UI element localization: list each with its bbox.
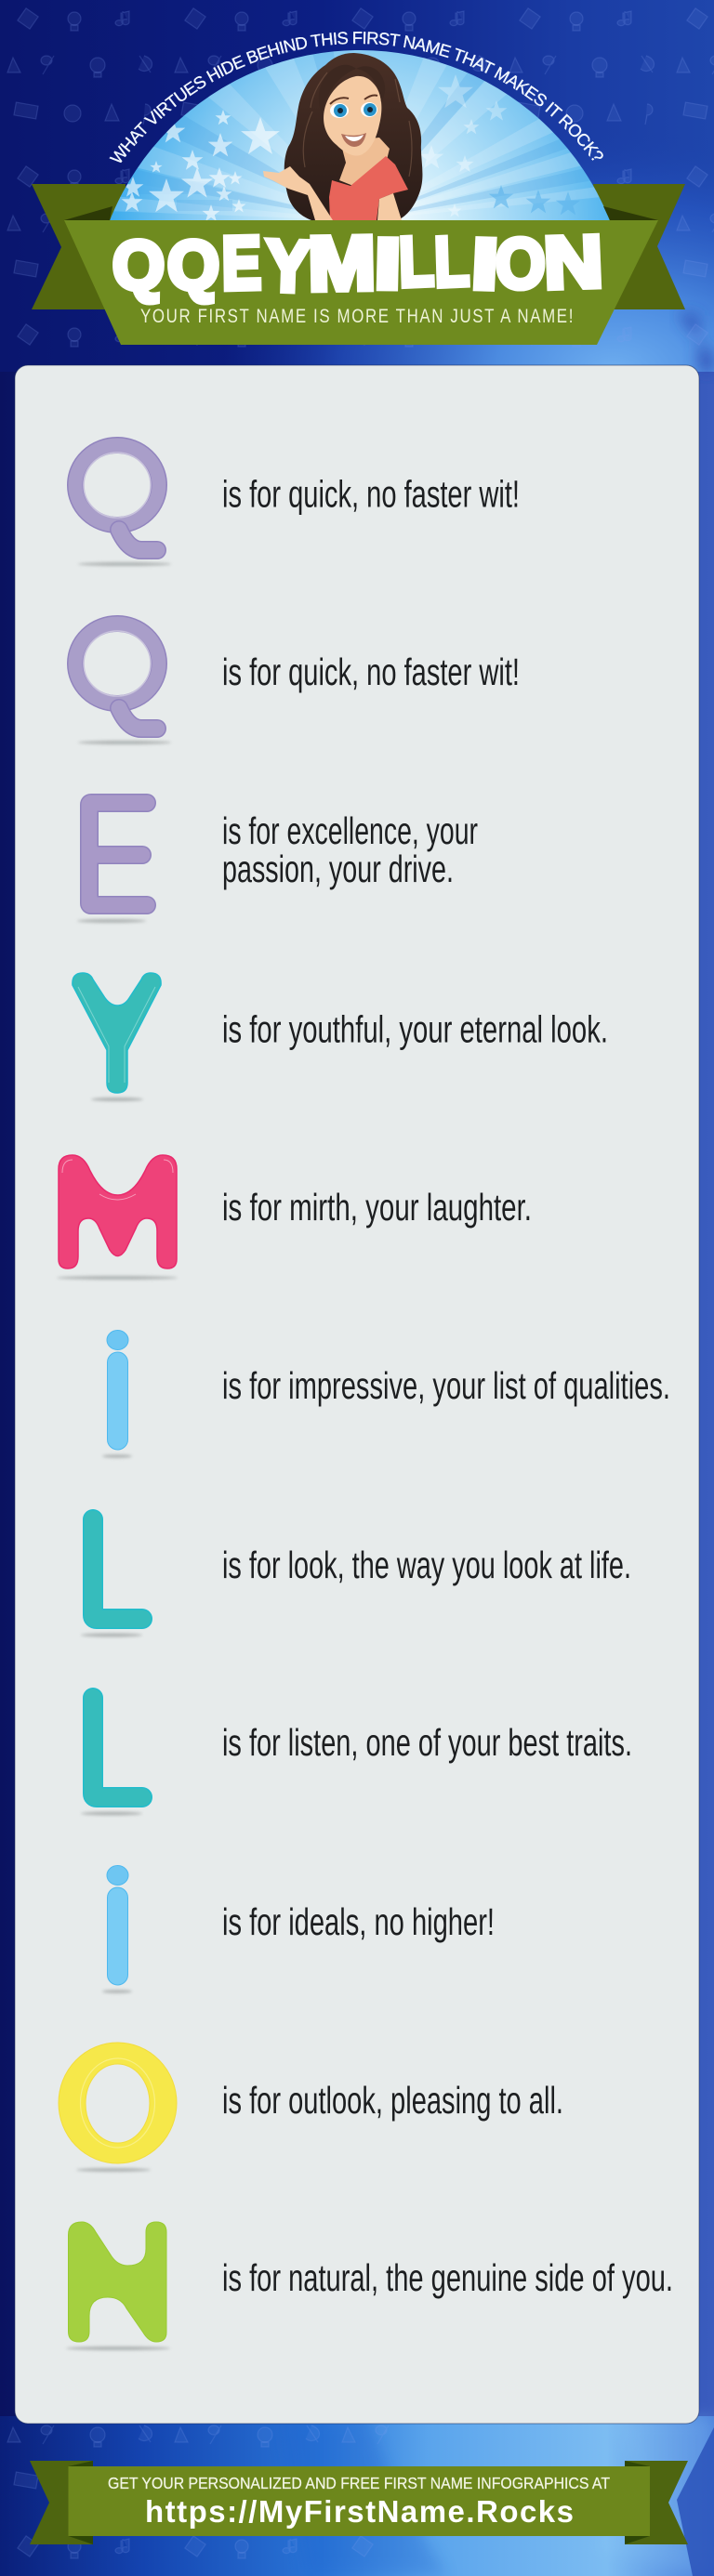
footer url: https://MyFirstName.Rocks (145, 2494, 574, 2529)
row 6: i (102, 1331, 670, 1458)
curved tagline: WHAT VIRTUES HIDE BEHIND THIS FIRST NAME THAT MAKES IT ROCK? (110, 32, 603, 164)
mouth (341, 133, 366, 147)
letter Q (75, 445, 171, 566)
text: is for excellence, your (222, 809, 478, 852)
text: is for ideals, no higher! (222, 1900, 495, 1943)
content panel (15, 365, 699, 2424)
row 4: Y (73, 973, 608, 1101)
letter L (81, 1519, 142, 1637)
row 10: O (59, 2043, 563, 2172)
name title: I (469, 224, 500, 305)
letter i (102, 1866, 132, 1993)
subtitle: YOUR FIRST NAME IS MORE THAN JUST A NAME! (140, 306, 575, 327)
hair (284, 53, 422, 220)
text: is for quick, no faster wit! (222, 472, 520, 515)
header banner front (64, 206, 658, 345)
arms and hand (263, 166, 402, 220)
name title: O (496, 225, 546, 304)
header banner back tails (32, 184, 685, 309)
name title: Y (264, 225, 312, 308)
text: is for outlook, pleasing to all. (222, 2079, 563, 2122)
shirt (329, 156, 408, 220)
face (324, 76, 381, 156)
text: is for mirth, your laughter. (222, 1186, 532, 1229)
name title: N (542, 220, 604, 305)
row 8: L (81, 1698, 632, 1816)
character illustration (263, 53, 422, 220)
name title: M (308, 220, 377, 307)
name title: L (433, 222, 470, 302)
name title: E (221, 221, 262, 306)
letter L (81, 1698, 142, 1816)
name title: Q (167, 228, 219, 304)
eyes (330, 95, 377, 118)
letter E (77, 803, 147, 923)
row 2: Q (75, 624, 520, 744)
name title: Q (112, 228, 165, 304)
row 3: E: passion, your drive. (222, 848, 454, 890)
row 7: L (81, 1519, 631, 1637)
row 9: i (102, 1866, 495, 1993)
letter i (102, 1331, 132, 1458)
text: is for quick, no faster wit! (222, 651, 520, 693)
row 3: E (77, 803, 478, 923)
footer ribbon (30, 2461, 688, 2544)
letter M (57, 1155, 178, 1280)
letter O (59, 2043, 177, 2172)
neck and chest (339, 138, 390, 186)
letter Y (73, 973, 161, 1101)
letter Q (75, 624, 171, 744)
name title: L (398, 222, 435, 302)
hair strands (303, 72, 412, 177)
hair fringe (319, 65, 385, 113)
row 1: Q (75, 445, 520, 566)
footer line 1: GET YOUR PERSONALIZED AND FREE FIRST NAME INFOGRAPHICS AT (108, 2474, 610, 2492)
dome with rays and stars (110, 50, 610, 220)
name title (112, 220, 604, 308)
row 5: M (57, 1155, 532, 1280)
letter N (66, 2222, 170, 2350)
row 11: N (66, 2222, 673, 2350)
name title: I (374, 224, 403, 304)
